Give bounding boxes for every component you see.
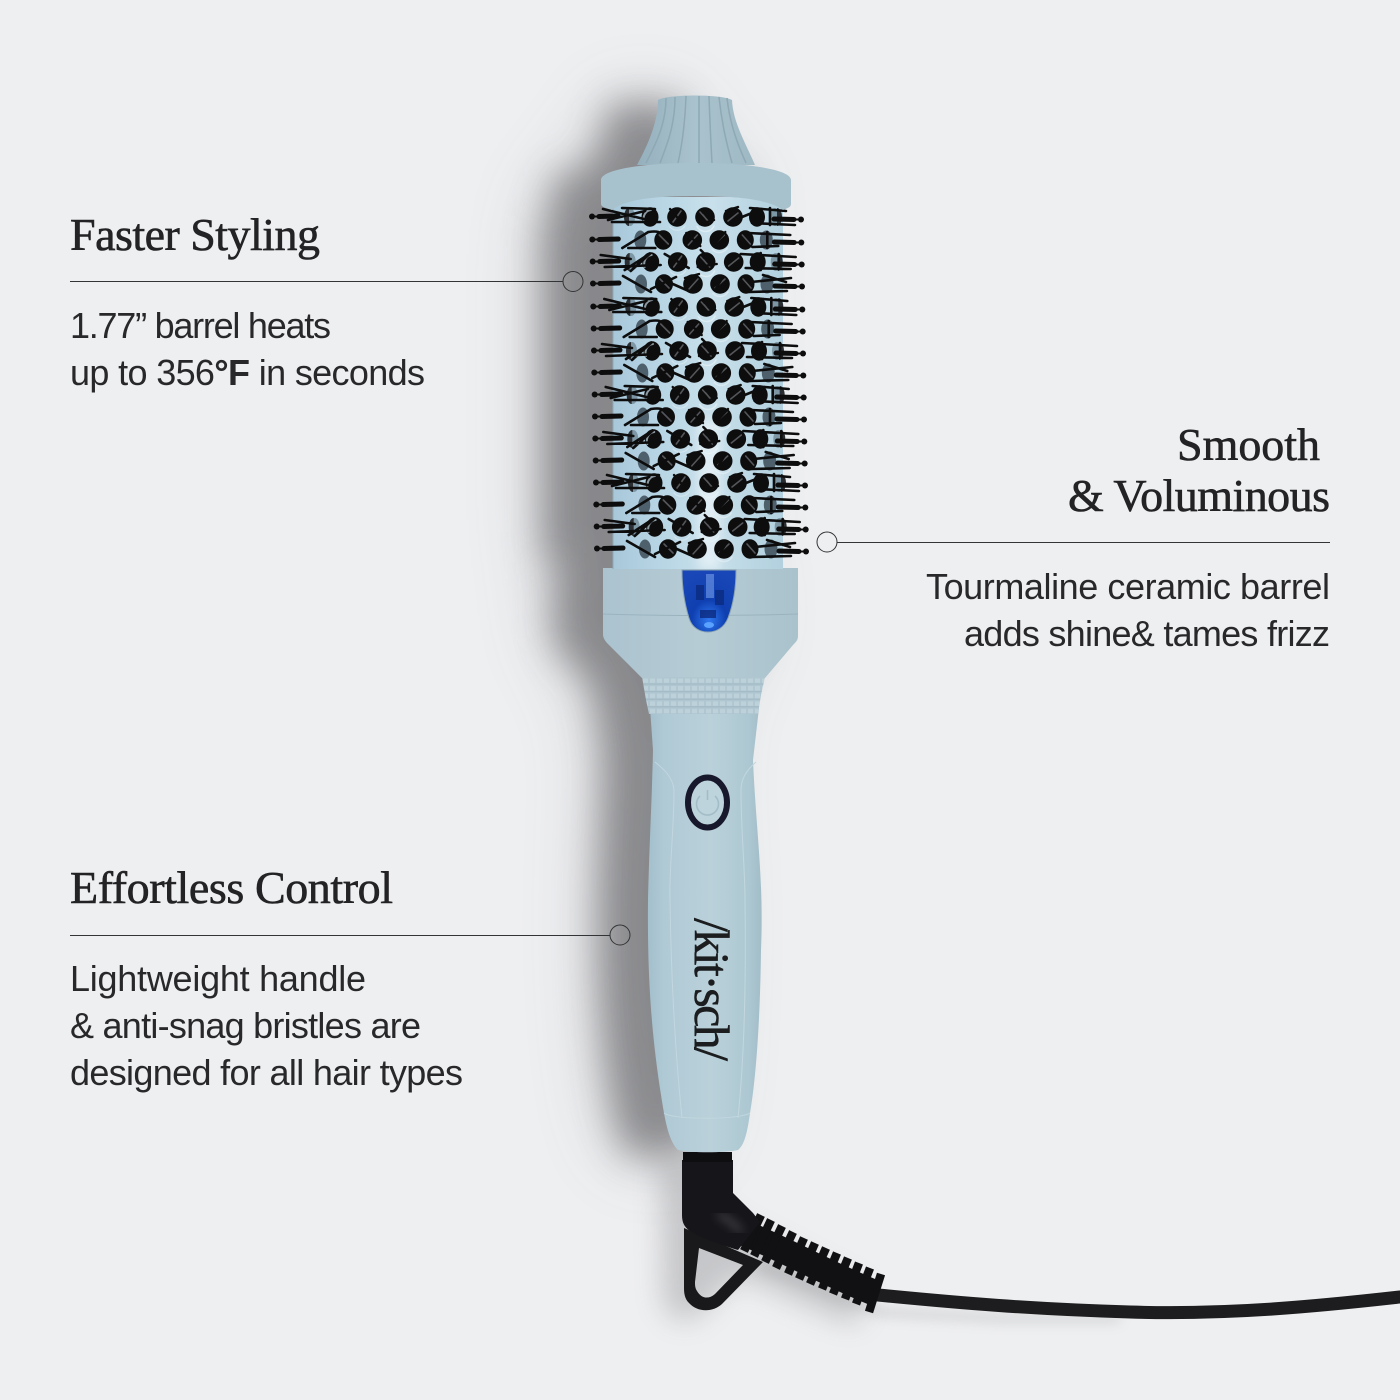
leader line <box>70 272 583 292</box>
hanging loop <box>684 1228 763 1310</box>
collar <box>603 568 798 678</box>
brand logo: /kit·sch/ <box>684 918 740 1061</box>
text: lightweight handle: & anti-snag bristles are <box>70 1005 421 1046</box>
top cone <box>637 96 755 165</box>
plug elbow <box>682 1160 760 1250</box>
text: ceramic barrel: Tourmaline ceramic barrel <box>926 566 1330 607</box>
callout: Smooth and Voluminous <box>817 419 1330 654</box>
callout: Effortless Control <box>70 862 630 1093</box>
text: barrel heats: 1.77” barrel heats <box>70 305 331 346</box>
strain relief <box>742 1215 881 1312</box>
text: lightweight handle: Lightweight handle <box>70 958 366 999</box>
text: ceramic barrel: adds shine& tames frizz <box>964 613 1330 654</box>
power button <box>688 778 727 828</box>
top ring <box>601 163 791 210</box>
product shadow <box>540 103 1120 1322</box>
cord <box>878 1295 1400 1313</box>
heading: Effortless Control: Effortless Control <box>70 862 393 913</box>
indicator light <box>682 570 736 632</box>
callout: Faster Styling <box>70 209 583 393</box>
bristles <box>589 207 809 561</box>
heading: Smooth and Voluminous: Smooth <box>1177 419 1320 470</box>
text: barrel heats: up to 356°F in seconds <box>70 352 425 393</box>
leader line <box>70 925 630 945</box>
handle <box>648 708 762 1152</box>
barrel <box>613 197 783 569</box>
heading: Smooth and Voluminous: & Voluminous <box>1068 470 1330 521</box>
product: hair brush <box>589 96 1400 1313</box>
text: lightweight handle: designed for all hair types <box>70 1052 463 1093</box>
leader line <box>817 532 1330 552</box>
heading: Faster Styling: Faster Styling <box>70 209 320 260</box>
knurled grip <box>642 677 765 714</box>
